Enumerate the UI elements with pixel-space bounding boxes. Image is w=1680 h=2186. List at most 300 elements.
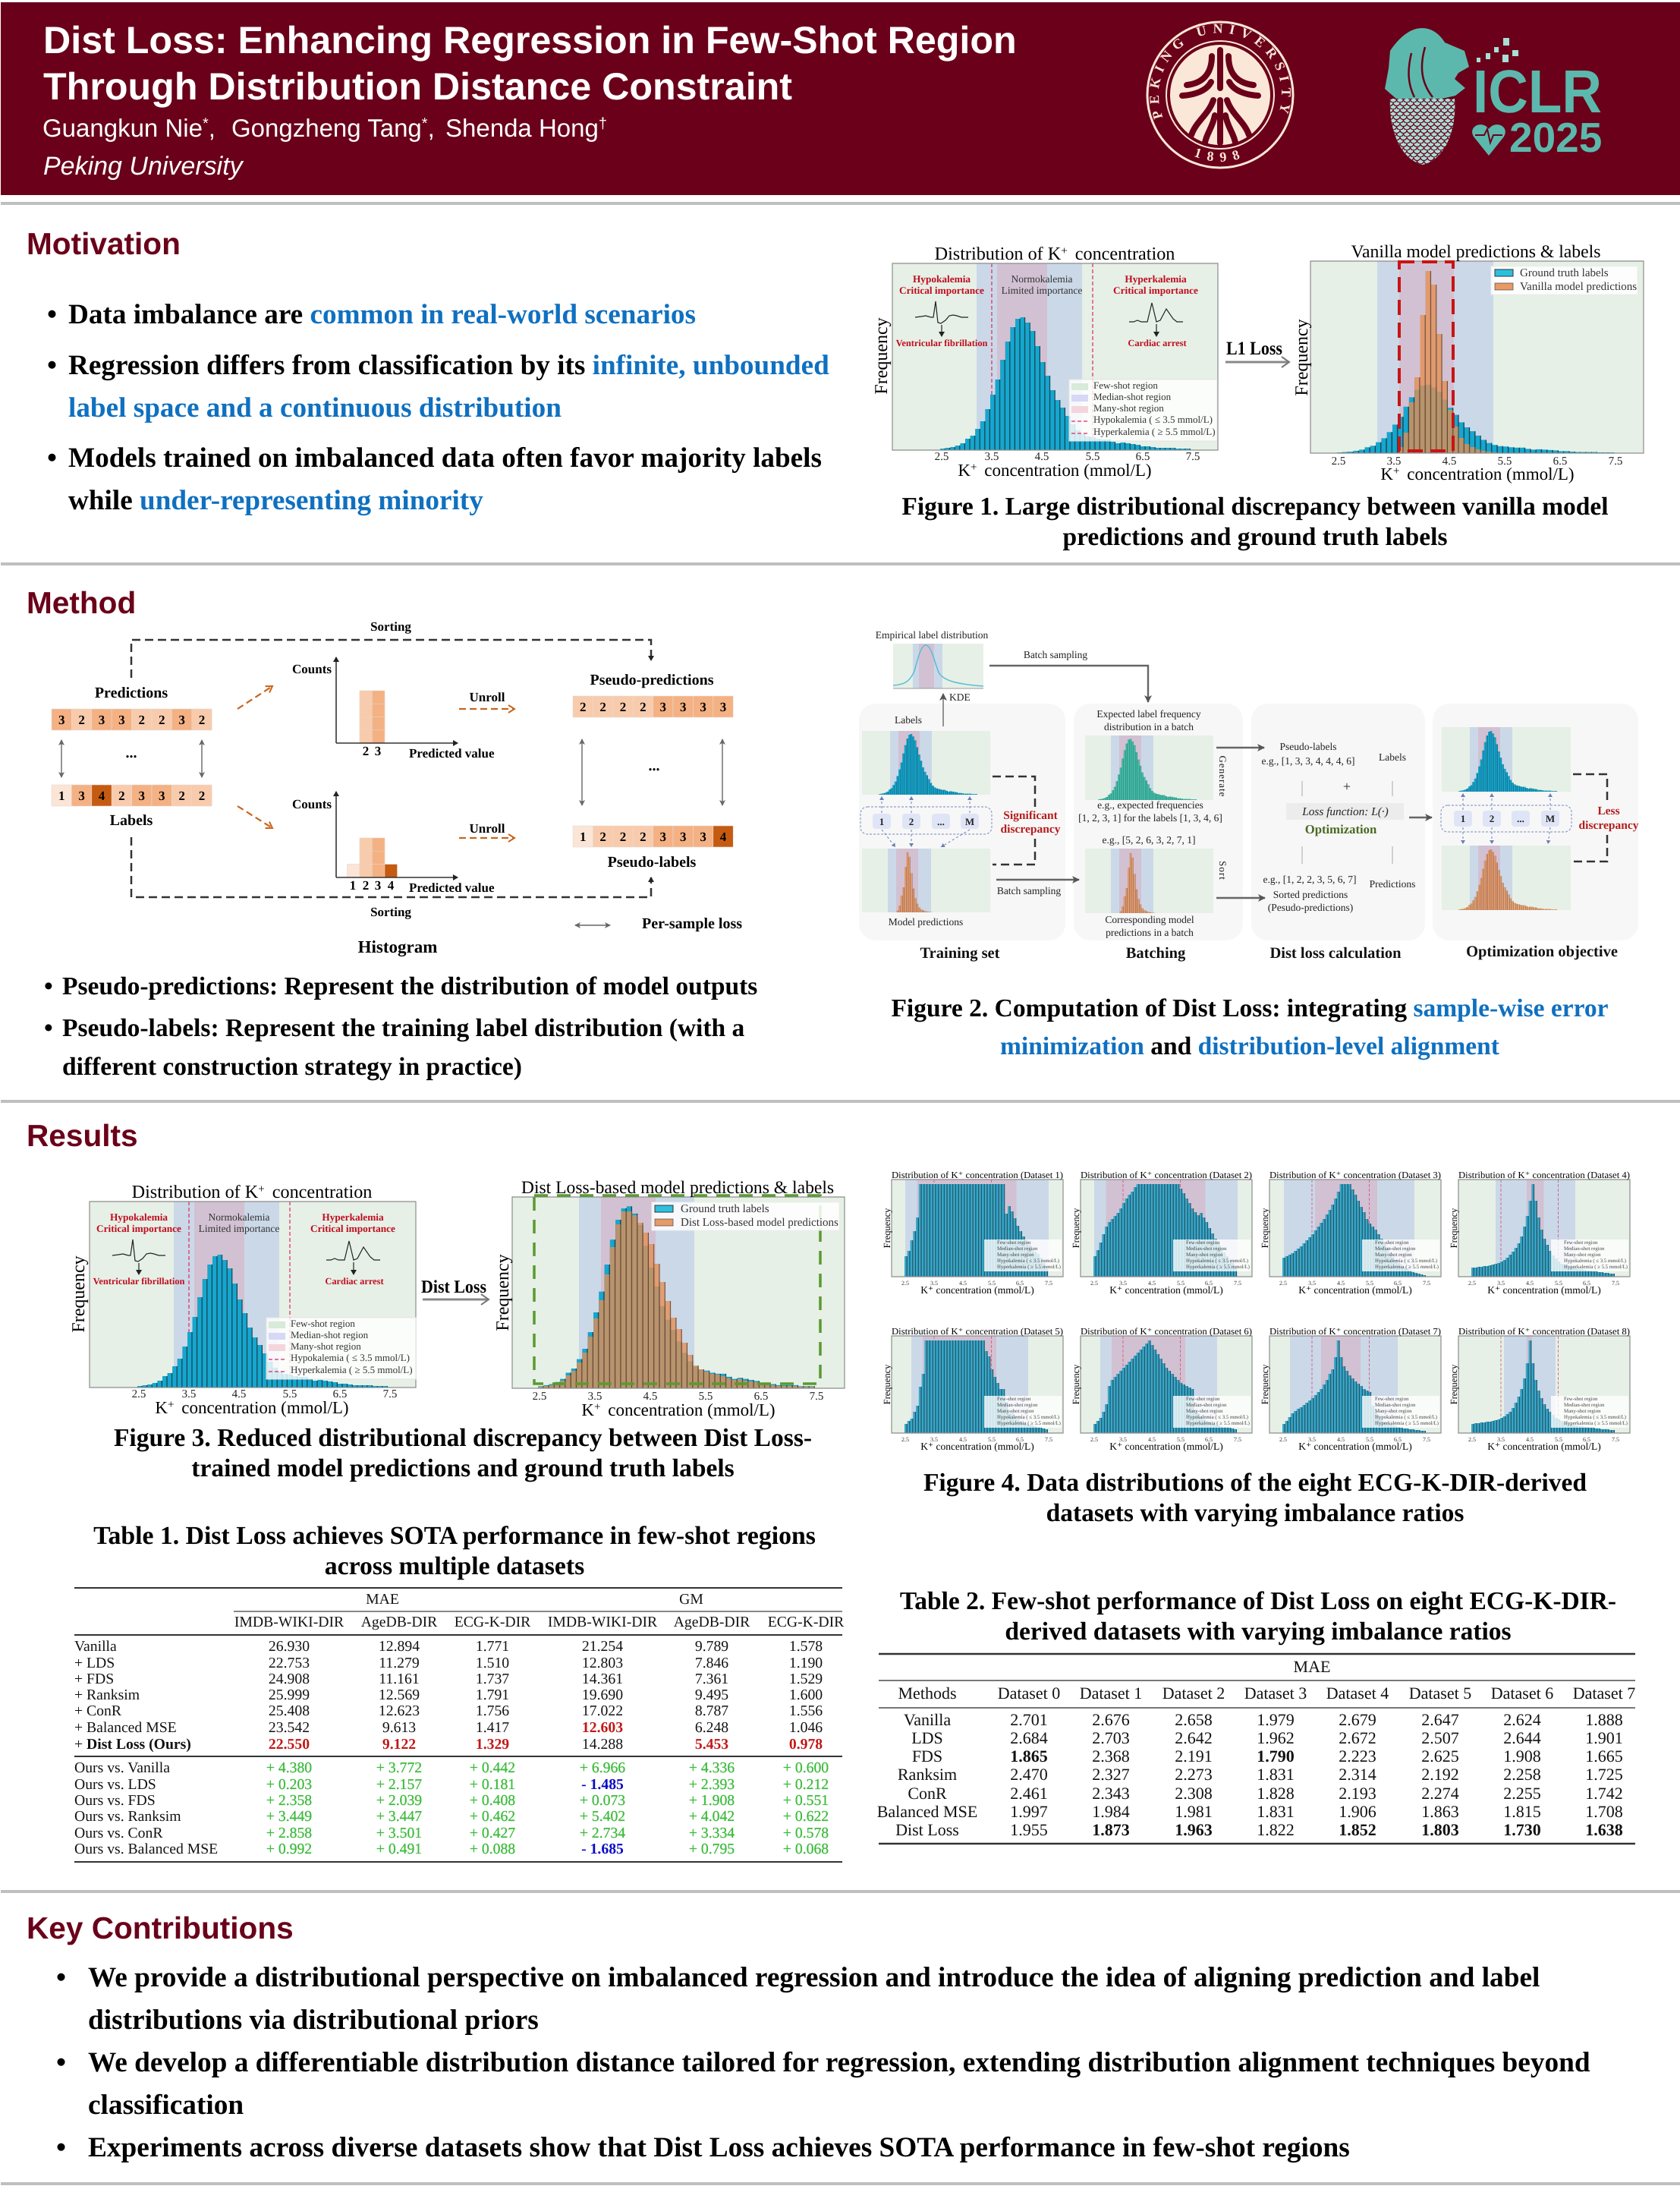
key contributions bullets	[56, 1962, 1590, 2163]
table 1: 11.161	[379, 1671, 420, 1687]
figure 1 caption: predictions and ground truth labels	[1063, 523, 1447, 551]
panel: training set: discrepancy	[1001, 823, 1061, 836]
chart: vanilla model predictions and labels (figure 1 right): 3.5	[1387, 455, 1401, 468]
pseudo-labels row: 2	[640, 830, 647, 844]
chart: distribution of K+ concentration (figure 3 left): 6.5	[333, 1388, 347, 1400]
chart: dataset 5	[882, 1326, 1063, 1452]
empirical label distribution: Empirical label distribution	[876, 629, 988, 641]
key contributions bullets: •	[56, 2047, 66, 2078]
chart: dataset 4: Many-shot region	[1564, 1252, 1601, 1258]
panel backgrounds	[859, 704, 1638, 940]
table 1: 25.408	[269, 1702, 310, 1719]
table 2: 1.955	[1010, 1820, 1048, 1839]
chart: dataset 2: Median-shot region	[1186, 1246, 1227, 1252]
table 2: 2.624	[1503, 1710, 1541, 1729]
panel: optimization objective: Less	[1597, 805, 1620, 817]
chart: dataset 5: Median-shot region	[997, 1403, 1038, 1408]
pseudo-predictions row: 2	[640, 700, 647, 714]
column titles: Dist loss calculation	[1269, 945, 1402, 962]
motivation bullets: Data imbalance are common in real-world scenarios	[68, 299, 696, 330]
panel: dist loss calculation: Loss function: L(·)	[1301, 805, 1389, 818]
predictions row: 2	[139, 713, 145, 727]
unroll arrow top	[459, 690, 514, 709]
per-sample arrows left: ...	[126, 745, 137, 761]
chart: dataset 7: 4.5	[1337, 1436, 1345, 1443]
table 1: 12.623	[379, 1702, 420, 1719]
chart: distribution of K+ concentration (figure 1 left): Critical importance	[899, 285, 984, 296]
table 1: + LDS	[74, 1655, 115, 1671]
table 2: 1.790	[1257, 1747, 1295, 1765]
table 2: Dataset 4	[1326, 1684, 1389, 1702]
table 1: 8.787	[695, 1702, 728, 1719]
logo: ICLR 2025 merlion	[1385, 28, 1602, 165]
table 1: 25.999	[269, 1687, 310, 1703]
panel: dist loss calculation: e.g., [1, 3, 3, 4, 4, 4, 6]	[1262, 755, 1354, 767]
chart: distribution of K+ concentration (figure 1 left): Median-shot region	[1093, 391, 1172, 402]
chart: dataset 2: 4.5	[1148, 1280, 1156, 1287]
authors: ,	[209, 114, 216, 142]
labels row: 3	[139, 789, 145, 803]
chart: dataset 1	[882, 1170, 1063, 1296]
table 2: 1.638	[1585, 1820, 1623, 1839]
chart: dist loss model predictions and labels (figure 3 right): concentration (mmol/L)	[604, 1400, 776, 1419]
chart: dataset 1: Hypokalemia ( ≤ 3.5 mmol/L)	[997, 1258, 1059, 1264]
chart: dataset 2: K⁺ concentration (mmol/L)	[1109, 1284, 1223, 1296]
labels histogram: Counts	[292, 797, 332, 811]
labels row: 1	[58, 789, 64, 803]
table 2: 2.193	[1339, 1784, 1376, 1803]
chart: dataset 5: 2.5	[901, 1436, 909, 1443]
chart: distribution of K+ concentration (figure 1 left): Critical importance	[1113, 285, 1198, 296]
chart: dataset 2: Frequency	[1071, 1208, 1081, 1248]
table 2: 1.828	[1257, 1784, 1295, 1803]
panel: optimization objective: discrepancy	[1579, 819, 1639, 832]
motivation bullets: Regression differs from classification by its infinite, unbounded	[68, 350, 829, 381]
chart: dist loss model predictions and labels (figure 3 right): 2.5	[533, 1391, 546, 1403]
predictions histogram: Counts	[292, 662, 332, 676]
pseudo-labels row: 2	[620, 830, 626, 844]
chart: dataset 3: 4.5	[1337, 1280, 1345, 1287]
table 1: + 4.042	[689, 1808, 735, 1825]
table 1: 19.690	[582, 1687, 623, 1703]
table 2: 1.665	[1585, 1747, 1623, 1765]
chart: dataset 5: Frequency	[882, 1364, 892, 1404]
chart: dataset 5: Distribution of K⁺ concentration (Dataset 5)	[892, 1326, 1063, 1337]
chart: dataset 8: Many-shot region	[1564, 1409, 1601, 1414]
chart: distribution of K+ concentration (figure 3 left): 3.5	[182, 1388, 196, 1400]
chart: distribution of K+ concentration (figure 1 left): Distribution of K	[935, 244, 1061, 264]
labels row: 3	[159, 789, 165, 803]
chart: dataset 7: Distribution of K⁺ concentration (Dataset 7)	[1269, 1326, 1441, 1337]
table 1: 9.789	[695, 1638, 728, 1655]
chart: dist loss model predictions and labels (figure 3 right): 3.5	[588, 1391, 602, 1403]
table 1: 12.803	[582, 1655, 623, 1671]
chart: dataset 7: 3.5	[1308, 1436, 1316, 1443]
figure 1 caption: Figure 1. Large distributional discrepancy between vanilla model	[901, 493, 1609, 521]
chart: distribution of K+ concentration (figure 3 left): Distribution of K	[132, 1182, 258, 1202]
table 2: Dataset 6	[1491, 1684, 1553, 1702]
table 2: MAE	[1294, 1657, 1330, 1676]
chart: dataset 6: Few-shot region	[1186, 1397, 1220, 1402]
table 1: + 0.795	[689, 1841, 735, 1857]
table 1: + 6.966	[580, 1759, 625, 1776]
table 1: + 0.462	[470, 1808, 515, 1825]
panel: batching	[1078, 708, 1265, 938]
chart: distribution of K+ concentration (figure 1 left): Hyperkalemia ( ≥ 5.5 mmol/L)	[1093, 426, 1216, 437]
table 2: 1.997	[1010, 1802, 1048, 1821]
table 1: + 2.157	[376, 1776, 422, 1793]
table 2: 2.644	[1503, 1728, 1541, 1747]
chart: dataset 3: Hyperkalemia ( ≥ 5.5 mmol/L)	[1375, 1265, 1439, 1270]
panel: training set: M	[965, 816, 974, 827]
pseudo-labels row: 3	[700, 830, 706, 844]
table 2: Ranksim	[898, 1765, 957, 1784]
table 1: 1.046	[789, 1719, 823, 1736]
chart: distribution of K+ concentration (figure 3 left): Normokalemia	[209, 1211, 269, 1223]
chart: dataset 3: Few-shot region	[1375, 1240, 1409, 1246]
predictions row	[52, 685, 212, 730]
heading: Key Contributions: Key Contributions	[27, 1910, 294, 1945]
top sorting path: Sorting	[370, 619, 411, 634]
table 2: 2.676	[1092, 1710, 1130, 1729]
unroll arrow bottom: Unroll	[470, 821, 505, 836]
table 1: 24.908	[269, 1671, 310, 1687]
table 1: Ours vs. Ranksim	[74, 1808, 181, 1825]
table 2: 2.672	[1339, 1728, 1376, 1747]
table 1: 11.279	[379, 1655, 420, 1671]
panel: batching: distribution in a batch	[1104, 721, 1194, 732]
pseudo-predictions row: 2	[599, 700, 606, 714]
table 1: 5.453	[695, 1736, 728, 1753]
logo: Peking University seal: PEKING UNIVERSITY	[1150, 24, 1291, 120]
table 2: 1.742	[1585, 1784, 1623, 1803]
chart: distribution of K+ concentration (figure 3 left): Hyperkalemia ( ≥ 5.5 mmol/L)	[291, 1364, 413, 1375]
chart: dataset 5: 6.5	[1016, 1436, 1024, 1443]
table 2: 2.701	[1010, 1710, 1048, 1729]
table 2: LDS	[911, 1728, 943, 1747]
pseudo-predictions row: 2	[620, 700, 626, 714]
table 2: 2.327	[1092, 1765, 1130, 1784]
chart: dataset 6: Frequency	[1071, 1364, 1081, 1404]
chart: dataset 4: 5.5	[1555, 1280, 1562, 1287]
chart: dataset 2	[1071, 1170, 1252, 1296]
chart: distribution of K+ concentration (figure 1 left)	[872, 244, 1218, 480]
labels histogram	[292, 792, 495, 895]
chart: dataset 7: 5.5	[1366, 1436, 1373, 1443]
chart: distribution of K+ concentration (figure 1 left): Few-shot region	[1093, 380, 1158, 391]
panel: batching: Corresponding model	[1105, 914, 1194, 925]
batch sampling top	[989, 649, 1148, 702]
table 1: + 0.212	[783, 1776, 829, 1793]
arrow: Dist Loss: Dist Loss	[421, 1277, 486, 1297]
table 2: 1.822	[1257, 1820, 1295, 1839]
chart: distribution of K+ concentration (figure 3 left): +	[168, 1399, 175, 1411]
table 2: 1.963	[1175, 1820, 1213, 1839]
chart: dataset 8	[1449, 1326, 1630, 1452]
chart: dataset 4: 7.5	[1612, 1280, 1619, 1287]
table 2 caption: Table 2. Few-shot performance of Dist Loss on eight ECG-K-DIR-	[900, 1587, 1616, 1615]
table 2: 1.984	[1092, 1802, 1130, 1821]
table 1: + 1.908	[689, 1792, 735, 1809]
chart: vanilla model predictions and labels (figure 1 right): 7.5	[1609, 455, 1622, 468]
empirical label distribution: KDE	[949, 691, 971, 703]
table 1: 22.753	[269, 1655, 310, 1671]
pseudo-labels row: 2	[599, 830, 606, 844]
chart: vanilla model predictions and labels (figure 1 right): 2.5	[1332, 455, 1345, 468]
poster title: Dist Loss: Enhancing Regression in Few-Shot Region	[43, 19, 1017, 61]
column titles: Optimization objective	[1466, 943, 1618, 960]
chart: vanilla model predictions and labels (figure 1 right): Frequency	[1292, 319, 1312, 396]
table 2: Methods	[898, 1684, 956, 1702]
table 2: Dist Loss	[895, 1820, 959, 1839]
method bullets	[44, 972, 757, 1081]
predictions row: Predictions	[95, 685, 168, 701]
table 1: 1.578	[789, 1638, 823, 1655]
key contributions bullets: We develop a differentiable distribution distance tailored for regression, extending distribution alignment techniques beyond	[88, 2047, 1590, 2078]
chart: distribution of K+ concentration (figure 1 left): +	[971, 461, 977, 474]
chart: dataset 5: 5.5	[988, 1436, 996, 1443]
chart: dataset 2: Distribution of K⁺ concentration (Dataset 2)	[1081, 1170, 1252, 1180]
key contributions bullets: We provide a distributional perspective on imbalanced regression and introduce the idea of aligning prediction and label	[88, 1962, 1540, 1993]
chart: dataset 1: Few-shot region	[997, 1240, 1031, 1246]
chart: dataset 5: 4.5	[959, 1436, 967, 1443]
table 1: 17.022	[582, 1702, 623, 1719]
predictions row: 3	[118, 713, 125, 727]
panel: dist loss calculation: Optimization	[1305, 822, 1377, 836]
chart: dataset 8: 3.5	[1497, 1436, 1505, 1443]
chart: dataset 5: Few-shot region	[997, 1397, 1031, 1402]
table 1: + 3.449	[266, 1808, 312, 1825]
table 1: + 4.336	[689, 1759, 735, 1776]
key contributions bullets: classification	[88, 2090, 244, 2121]
chart: distribution of K+ concentration (figure 1 left): Limited importance	[1002, 285, 1082, 296]
chart: distribution of K+ concentration (figure 3 left): 5.5	[283, 1388, 297, 1400]
column titles: Batching	[1126, 945, 1186, 962]
table 1: 14.361	[582, 1671, 623, 1687]
table 2: 1.865	[1010, 1747, 1048, 1765]
table 2: 2.314	[1339, 1765, 1376, 1784]
panel: optimization objective: M	[1546, 813, 1555, 824]
poster title: Through Distribution Distance Constraint	[43, 65, 792, 108]
chart: dataset 6: Hyperkalemia ( ≥ 5.5 mmol/L)	[1186, 1421, 1250, 1426]
key contributions bullets: •	[56, 2132, 66, 2163]
table 2: 1.908	[1503, 1747, 1541, 1765]
chart: dataset 6: Many-shot region	[1186, 1409, 1223, 1414]
table 1: + 0.551	[783, 1792, 829, 1809]
chart: dataset 2: 7.5	[1234, 1280, 1241, 1287]
table 1: + 0.073	[580, 1792, 625, 1809]
predictions row: 2	[78, 713, 85, 727]
motivation bullets	[47, 299, 829, 516]
predictions row: 2	[159, 713, 165, 727]
chart: dataset 6: 6.5	[1205, 1436, 1213, 1443]
panel: dist loss calculation: Pseudo-labels	[1279, 741, 1337, 752]
table 1: + 3.501	[376, 1825, 422, 1841]
table 2 caption: derived datasets with varying imbalance ratios	[1005, 1617, 1512, 1646]
table 1: Ours vs. LDS	[74, 1776, 156, 1793]
diagram: computation of Dist Loss (figure 2)	[859, 629, 1639, 962]
pseudo-labels row: 1	[580, 830, 586, 844]
logo: Peking University seal: 1898	[1194, 149, 1240, 162]
predictions histogram: Predicted value	[409, 746, 495, 761]
table 2: 1.852	[1339, 1820, 1376, 1839]
chart: distribution of K+ concentration (figure 1 left): concentration (mmol/L)	[980, 461, 1152, 480]
chart: dataset 2: Hyperkalemia ( ≥ 5.5 mmol/L)	[1186, 1265, 1250, 1270]
motivation bullets: •	[47, 443, 57, 474]
table 1: + 2.039	[376, 1792, 422, 1809]
panel: optimization objective: 1	[1461, 813, 1465, 824]
table 1: 12.569	[379, 1687, 420, 1703]
chart: dist loss model predictions and labels (figure 3 right)	[493, 1178, 845, 1419]
chart: distribution of K+ concentration (figure 3 left): Hyperkalemia	[322, 1211, 384, 1223]
chart: dataset 4: Frequency	[1449, 1208, 1459, 1248]
chart: distribution of K+ concentration (figure 3 left): 4.5	[232, 1388, 246, 1400]
table 1: + 0.181	[470, 1776, 515, 1793]
pseudo-labels row	[573, 826, 733, 871]
chart: dataset 4: Hyperkalemia ( ≥ 5.5 mmol/L)	[1564, 1265, 1628, 1270]
motivation bullets: label space and a continuous distribution	[68, 392, 562, 424]
table 1: AgeDB-DIR	[674, 1614, 750, 1630]
table 2: 1.906	[1339, 1802, 1376, 1821]
empirical label distribution	[876, 629, 988, 726]
table 1: AgeDB-DIR	[361, 1614, 438, 1630]
panel: dist loss calculation: Predictions	[1370, 878, 1415, 890]
table 2: 1.901	[1585, 1728, 1623, 1747]
panel: training set: Labels	[895, 714, 922, 726]
chart: dataset 6: 4.5	[1148, 1436, 1156, 1443]
pseudo-labels row: 3	[660, 830, 666, 844]
table 2: Dataset 5	[1409, 1684, 1471, 1702]
table 1: + 0.442	[470, 1759, 515, 1776]
panel: training set: 2	[909, 816, 914, 827]
table 1: + Dist Loss (Ours)	[74, 1736, 191, 1753]
table 2: 2.507	[1421, 1728, 1459, 1747]
pseudo-labels row: 4	[720, 830, 727, 844]
unroll arrow top: Unroll	[470, 690, 505, 704]
orange arrows to histograms	[238, 686, 272, 828]
chart: dataset 3: Distribution of K⁺ concentration (Dataset 3)	[1269, 1170, 1441, 1180]
chart: dataset 5: K⁺ concentration (mmol/L)	[920, 1441, 1034, 1452]
chart: dataset 6: Hypokalemia ( ≤ 3.5 mmol/L)	[1186, 1415, 1248, 1420]
chart: dist loss model predictions and labels (figure 3 right): 5.5	[699, 1391, 713, 1403]
pseudo-predictions row: 3	[660, 700, 666, 714]
chart: dataset 5: Hypokalemia ( ≤ 3.5 mmol/L)	[997, 1415, 1059, 1420]
authors: *	[203, 115, 209, 132]
chart: dataset 1: Hyperkalemia ( ≥ 5.5 mmol/L)	[997, 1265, 1061, 1270]
authors: †	[599, 115, 607, 132]
bottom sorting path: Sorting	[370, 905, 411, 919]
chart: distribution of K+ concentration (figure 1 left): 4.5	[1035, 451, 1049, 463]
chart: distribution of K+ concentration (figure 1 left): Normokalemia	[1011, 273, 1072, 285]
table 2: 2.258	[1503, 1765, 1541, 1784]
heading: Motivation: Motivation	[27, 226, 181, 261]
table 1: Ours vs. Vanilla	[74, 1759, 170, 1776]
table 1: + FDS	[74, 1671, 114, 1687]
chart: dataset 5: 7.5	[1045, 1436, 1052, 1443]
table 1: Ours vs. Balanced MSE	[74, 1841, 218, 1857]
table 1: + 3.447	[376, 1808, 422, 1825]
predictions row: 3	[99, 713, 105, 727]
chart: vanilla model predictions and labels (figure 1 right): 6.5	[1553, 455, 1567, 468]
key contributions bullets: distributions via distributional priors	[88, 2005, 539, 2036]
panel: dist loss calculation: Labels	[1379, 751, 1406, 763]
table 1: 6.248	[695, 1719, 728, 1736]
chart: dataset 1: Median-shot region	[997, 1246, 1038, 1252]
chart: dataset 3: K⁺ concentration (mmol/L)	[1298, 1284, 1412, 1296]
chart: dataset 5: Hyperkalemia ( ≥ 5.5 mmol/L)	[997, 1421, 1061, 1426]
chart: distribution of K+ concentration (figure 1 left): K	[958, 461, 971, 480]
panel: training set	[860, 714, 1079, 928]
chart: dataset 7: Hyperkalemia ( ≥ 5.5 mmol/L)	[1375, 1421, 1439, 1426]
table 2: 2.274	[1421, 1784, 1459, 1803]
chart: dataset 4	[1449, 1170, 1630, 1296]
chart: dataset 7: 6.5	[1394, 1436, 1402, 1443]
table 1: 26.930	[269, 1638, 310, 1655]
table 2: 1.863	[1421, 1802, 1459, 1821]
chart: dataset 3: Frequency	[1260, 1208, 1270, 1248]
chart: dataset 1: K⁺ concentration (mmol/L)	[920, 1284, 1034, 1296]
chart: dataset 7: 2.5	[1279, 1436, 1287, 1443]
chart: distribution of K+ concentration (figure 3 left): 2.5	[132, 1388, 146, 1400]
chart: distribution of K+ concentration (figure 3 left): +	[258, 1183, 265, 1195]
motivation bullets: •	[47, 350, 57, 381]
figure 4 caption: Figure 4. Data distributions of the eight ECG-K-DIR-derived	[923, 1469, 1587, 1497]
table 2: 2.625	[1421, 1747, 1459, 1765]
chart: distribution of K+ concentration (figure 1 left): Ventricular fibrillation	[896, 338, 988, 348]
table 2: 2.642	[1175, 1728, 1213, 1747]
chart: dataset 4: Median-shot region	[1564, 1246, 1605, 1252]
pseudo-labels row: Pseudo-labels	[608, 854, 697, 871]
table 1: 14.288	[582, 1736, 623, 1753]
panel: training set: Model predictions	[889, 916, 963, 928]
table 2: Vanilla	[904, 1710, 951, 1729]
panel: dist loss calculation: +	[1343, 779, 1351, 794]
chart: dataset 6: Median-shot region	[1186, 1403, 1227, 1408]
pseudo-predictions row: 3	[720, 700, 726, 714]
chart: dataset 7: Few-shot region	[1375, 1397, 1409, 1402]
panel: batching: [1, 2, 3, 1] for the labels [1, 3, 4, 6]	[1078, 812, 1222, 824]
table 1: 21.254	[582, 1638, 623, 1655]
chart: dataset 7: 7.5	[1423, 1436, 1430, 1443]
table 2: 2.658	[1175, 1710, 1213, 1729]
chart: dist loss model predictions and labels (figure 3 right): Dist Loss-based model predictions & labels	[521, 1178, 834, 1198]
chart: distribution of K+ concentration (figure 1 left): 2.5	[935, 451, 949, 463]
chart: distribution of K+ concentration (figure 1 left): +	[1061, 245, 1068, 257]
chart: vanilla model predictions and labels (figure 1 right): 4.5	[1442, 455, 1456, 468]
labels histogram: 4	[388, 878, 395, 893]
table 1: + 2.858	[266, 1825, 312, 1841]
predictions histogram: 2	[363, 744, 369, 758]
table 1: + 3.334	[689, 1825, 735, 1841]
chart: distribution of K+ concentration (figure 3 left): Critical importance	[96, 1223, 181, 1234]
label: Histogram: Histogram	[358, 937, 437, 957]
chart: dataset 2: 3.5	[1119, 1280, 1127, 1287]
table 1: + 0.068	[783, 1841, 829, 1857]
chart: distribution of K+ concentration (figure 3 left): Critical importance	[310, 1223, 395, 1234]
table 1: + Ranksim	[74, 1687, 140, 1703]
chart: distribution of K+ concentration (figure 3 left): Hypokalemia	[110, 1211, 168, 1223]
table 2: 2.647	[1421, 1710, 1459, 1729]
chart: dataset 2: 5.5	[1177, 1280, 1184, 1287]
chart: distribution of K+ concentration (figure 1 left): 6.5	[1136, 451, 1150, 463]
top sorting path	[131, 619, 651, 678]
chart: dataset 1: 3.5	[930, 1280, 938, 1287]
chart: dataset 6: 5.5	[1177, 1436, 1184, 1443]
chart: distribution of K+ concentration (figure 3 left): Few-shot region	[291, 1318, 355, 1329]
labels histogram: Predicted value	[409, 880, 495, 895]
panel: batching: Sort	[1217, 861, 1229, 880]
chart: dist loss model predictions and labels (figure 3 right): Ground truth labels	[681, 1203, 769, 1215]
